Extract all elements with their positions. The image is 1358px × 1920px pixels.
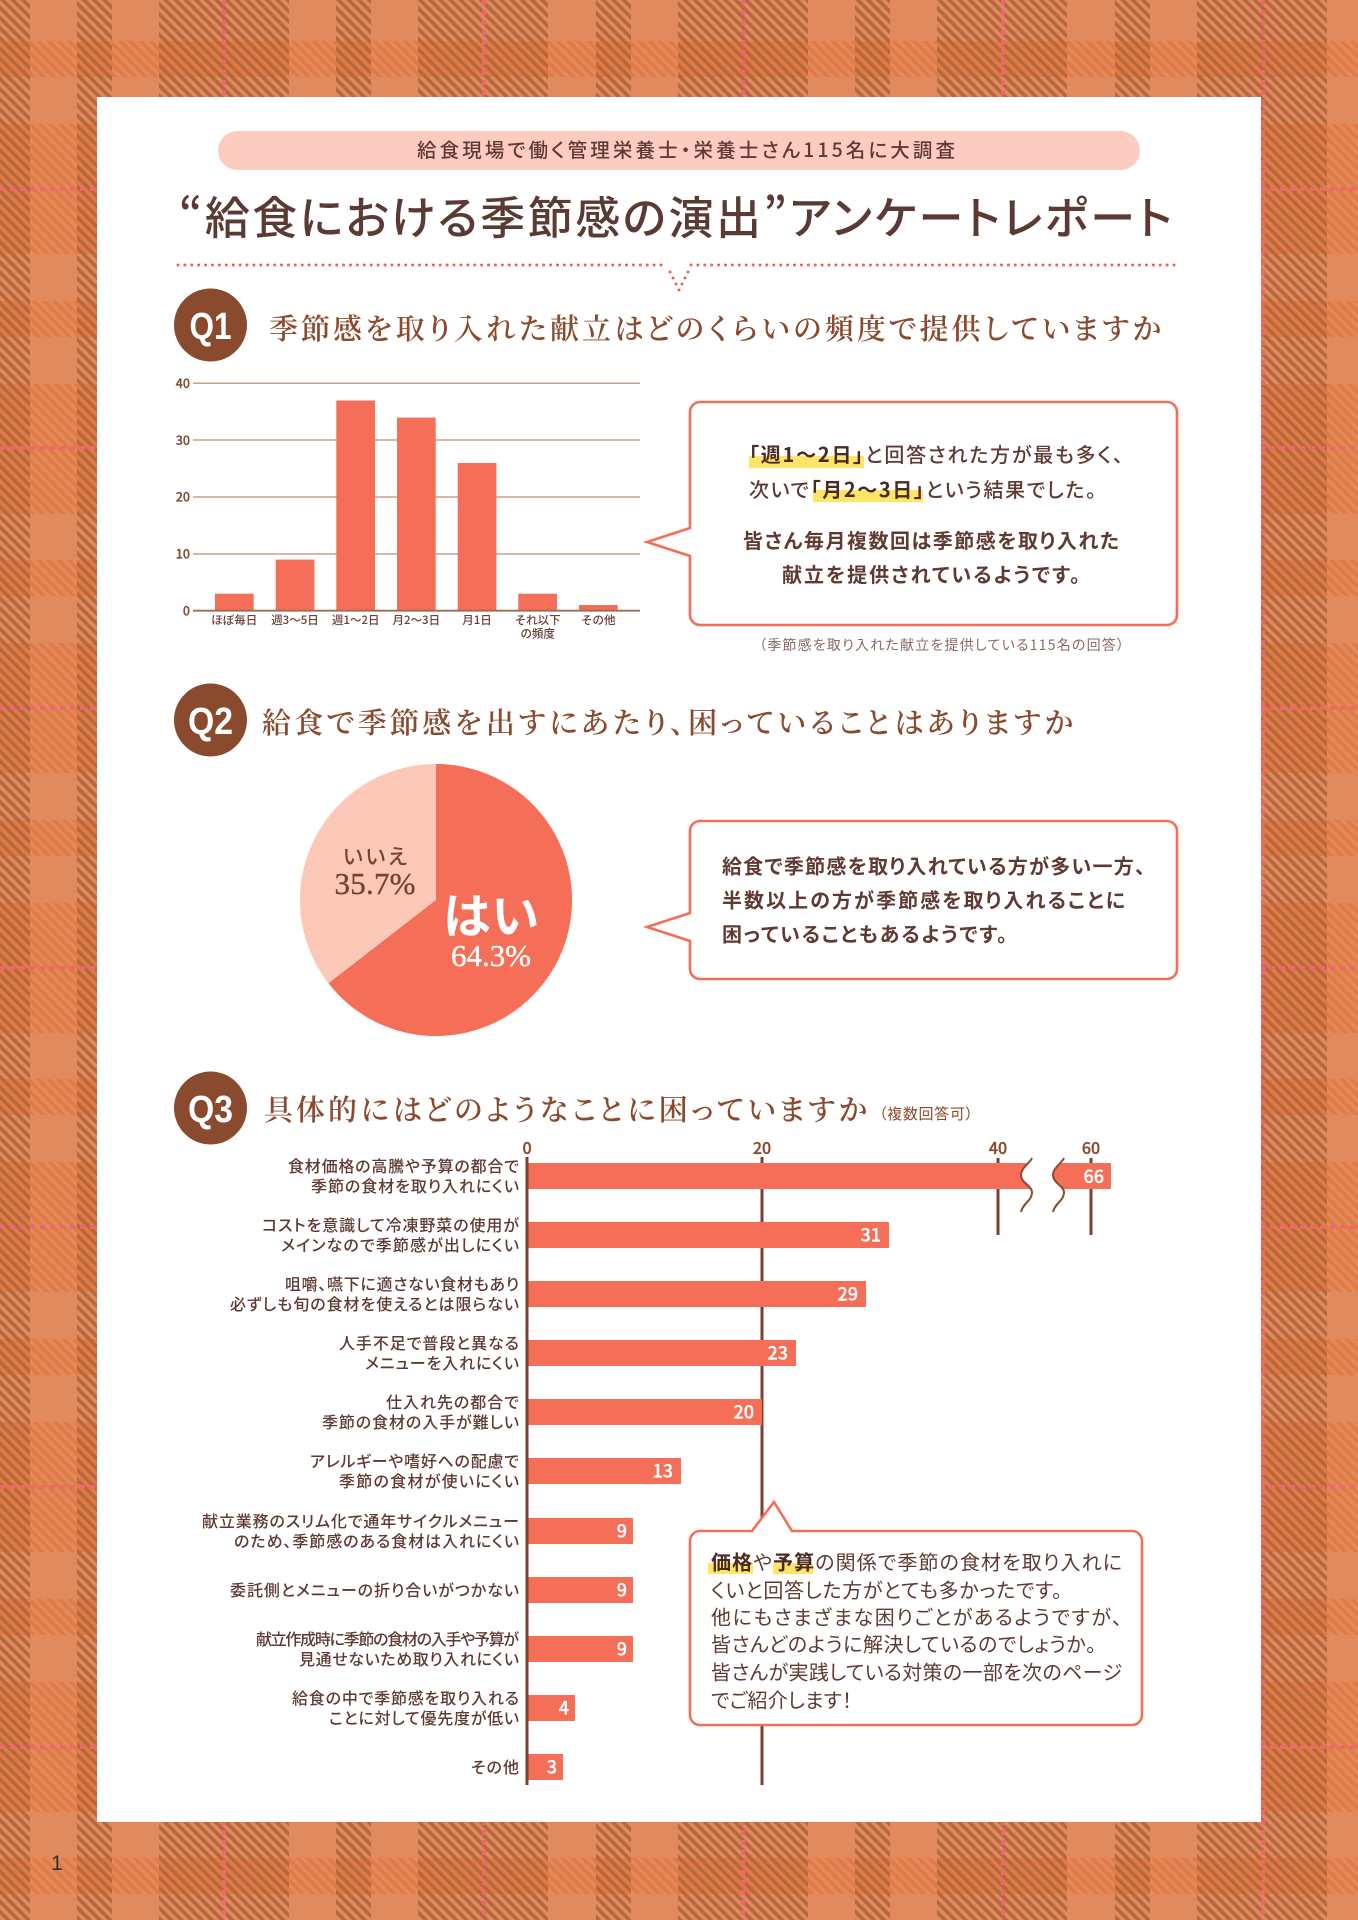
- bar labels: その他: [471, 1754, 519, 1778]
- Q2 pie chart: 35.7%: [334, 866, 416, 901]
- page number: 1: [51, 1852, 63, 1875]
- bar values: 29: [837, 1280, 858, 1306]
- Q1 bar chart: それ以下: [515, 612, 561, 628]
- Q2 callout: 半数以上の方が季節感を取り入れることに: [722, 884, 1125, 914]
- Q1 caption: （季節感を取り入れた献立を提供している115名の回答）: [759, 635, 1124, 655]
- bar labels: 委託側とメニューの折り合いがつかない: [230, 1577, 519, 1601]
- Q1 bar chart: ほぼ毎日: [211, 612, 257, 628]
- header pill: 給食現場で働く管理栄養士・栄養士さん115名に大調査: [417, 134, 955, 163]
- bar values: 31: [860, 1222, 881, 1248]
- Q3 callout: 皆さんどのように解決しているのでしょうか。: [711, 1628, 1096, 1658]
- bar labels: 献立作成時に季節の食材の入手や予算が: [256, 1626, 519, 1650]
- Q1 bar chart: 20: [176, 486, 190, 506]
- Q1 bar chart: 週3～5日: [271, 612, 319, 628]
- bar labels: 給食の中で季節感を取り入れる: [292, 1685, 519, 1709]
- Q3 callout: 価格や予算の関係で季節の食材を取り入れに: [711, 1546, 1122, 1576]
- bar values: 3: [547, 1754, 557, 1780]
- Q2 callout: 給食で季節感を取り入れている方が多い一方、: [722, 850, 1145, 880]
- Q1 callout: [647, 402, 1177, 625]
- bar labels: 必ずしも旬の食材を使えるとは限らない: [230, 1291, 519, 1315]
- bar values: 13: [652, 1458, 673, 1484]
- Q1 bar chart: 週1～2日: [332, 612, 380, 628]
- Q1 bar chart: その他: [581, 612, 616, 628]
- Q2 pie chart: 64.3%: [451, 938, 531, 973]
- bar labels: 見通せないため取り入れにくい: [299, 1646, 519, 1670]
- Q2 pie chart: はい: [443, 877, 539, 947]
- Q1 heading: [174, 288, 1161, 362]
- Q2 heading: 給食で季節感を出すにあたり、困っていることはありますか: [262, 701, 1073, 742]
- Q1 bar chart: 10: [176, 544, 190, 562]
- Q3 callout: くいと回答した方がとても多かったです。: [711, 1574, 1062, 1604]
- Q1 bar chart: 0: [183, 600, 190, 620]
- bar labels: 季節の食材が使いにくい: [339, 1468, 519, 1492]
- bar labels: コストを意識して冷凍野菜の使用が: [262, 1212, 519, 1236]
- bars: [527, 1163, 1111, 1780]
- bar values: 9: [617, 1518, 627, 1544]
- Q2 pie chart: いいえ: [343, 841, 407, 871]
- bar labels: メニューを入れにくい: [365, 1350, 519, 1374]
- Q1 callout: 「週1～2日」と回答された方が最も多く、: [749, 439, 1123, 468]
- Q1 heading: Q1: [190, 306, 232, 348]
- Q1 bar chart: 30: [176, 430, 190, 449]
- bar labels: のため、季節感のある食材は入れにくい: [234, 1528, 519, 1552]
- bar values: 23: [767, 1340, 788, 1366]
- Q1 bar chart: 40: [176, 373, 190, 392]
- bar values: 20: [733, 1398, 754, 1424]
- Q2 callout: 困っていることもあるようです。: [722, 918, 1007, 948]
- bar labels: [202, 1153, 519, 1778]
- axis tick labels: [522, 1135, 1100, 1159]
- bar labels: 咀嚼、嚥下に適さない食材もあり: [285, 1271, 519, 1295]
- bar labels: 季節の食材を取り入れにくい: [311, 1173, 519, 1197]
- Q2 heading: [174, 684, 1073, 756]
- Q3 heading: （複数回答可）: [879, 1103, 973, 1124]
- axis tick labels: 0: [522, 1135, 532, 1159]
- title: “給食における季節感の演出”アンケートレポート: [179, 182, 1172, 247]
- header pill: [218, 131, 1140, 170]
- bar labels: 季節の食材の入手が難しい: [322, 1409, 519, 1433]
- bar values: 9: [617, 1576, 627, 1602]
- axis tick labels: 20: [753, 1135, 771, 1159]
- bar labels: アレルギーや嗜好への配慮で: [310, 1448, 519, 1472]
- bar labels: ことに対して優先度が低い: [329, 1705, 519, 1729]
- bar labels: 食材価格の高騰や予算の都合で: [288, 1153, 519, 1177]
- bar values: 66: [1083, 1163, 1104, 1189]
- Q3 heading: [174, 1072, 973, 1144]
- bar values: 9: [617, 1636, 627, 1662]
- dotted divider: [178, 265, 1180, 290]
- Q1 bar chart: 月1日: [462, 612, 492, 628]
- bar labels: 仕入れ先の都合で: [386, 1389, 519, 1413]
- Q2 heading: Q2: [188, 701, 233, 743]
- white content panel: [97, 97, 1261, 1822]
- Q3 callout: [690, 1502, 1142, 1725]
- Q3 heading: Q3: [188, 1089, 233, 1131]
- Q2 callout: [647, 821, 1177, 979]
- Q1 callout: 献立を提供されているようです。: [782, 559, 1080, 588]
- Q3 horizontal bar chart: [202, 1135, 1111, 1785]
- bar labels: 献立業務のスリム化で通年サイクルメニュー: [202, 1508, 519, 1532]
- bar labels: メインなので季節感が出しにくい: [281, 1232, 519, 1256]
- Q3 callout: でご紹介します！: [711, 1684, 852, 1714]
- Q1 heading: 季節感を取り入れた献立はどのくらいの頻度で提供していますか: [269, 307, 1161, 348]
- Q1 bar chart: の頻度: [520, 626, 555, 642]
- Q1 bar chart: [176, 373, 640, 642]
- Q3 heading: 具体的にはどのようなことに困っていますか: [264, 1088, 867, 1129]
- axis tick labels: 40: [989, 1135, 1007, 1159]
- Q2 pie chart: [300, 764, 572, 1036]
- Q1 callout: 皆さん毎月複数回は季節感を取り入れた: [743, 525, 1119, 554]
- axis tick labels: 60: [1082, 1135, 1100, 1159]
- Q3 callout: 皆さんが実践している対策の一部を次のページ: [711, 1656, 1122, 1686]
- Q3 callout: 他にもさまざまな困りごとがあるようですが、: [711, 1602, 1122, 1630]
- Q1 bar chart: 月2～3日: [392, 612, 440, 628]
- Q1 callout: 次いで「月2～3日」という結果でした。: [749, 474, 1096, 503]
- bar values: 4: [559, 1694, 569, 1720]
- bar values: [547, 1163, 1104, 1780]
- bar labels: 人手不足で普段と異なる: [339, 1330, 519, 1354]
